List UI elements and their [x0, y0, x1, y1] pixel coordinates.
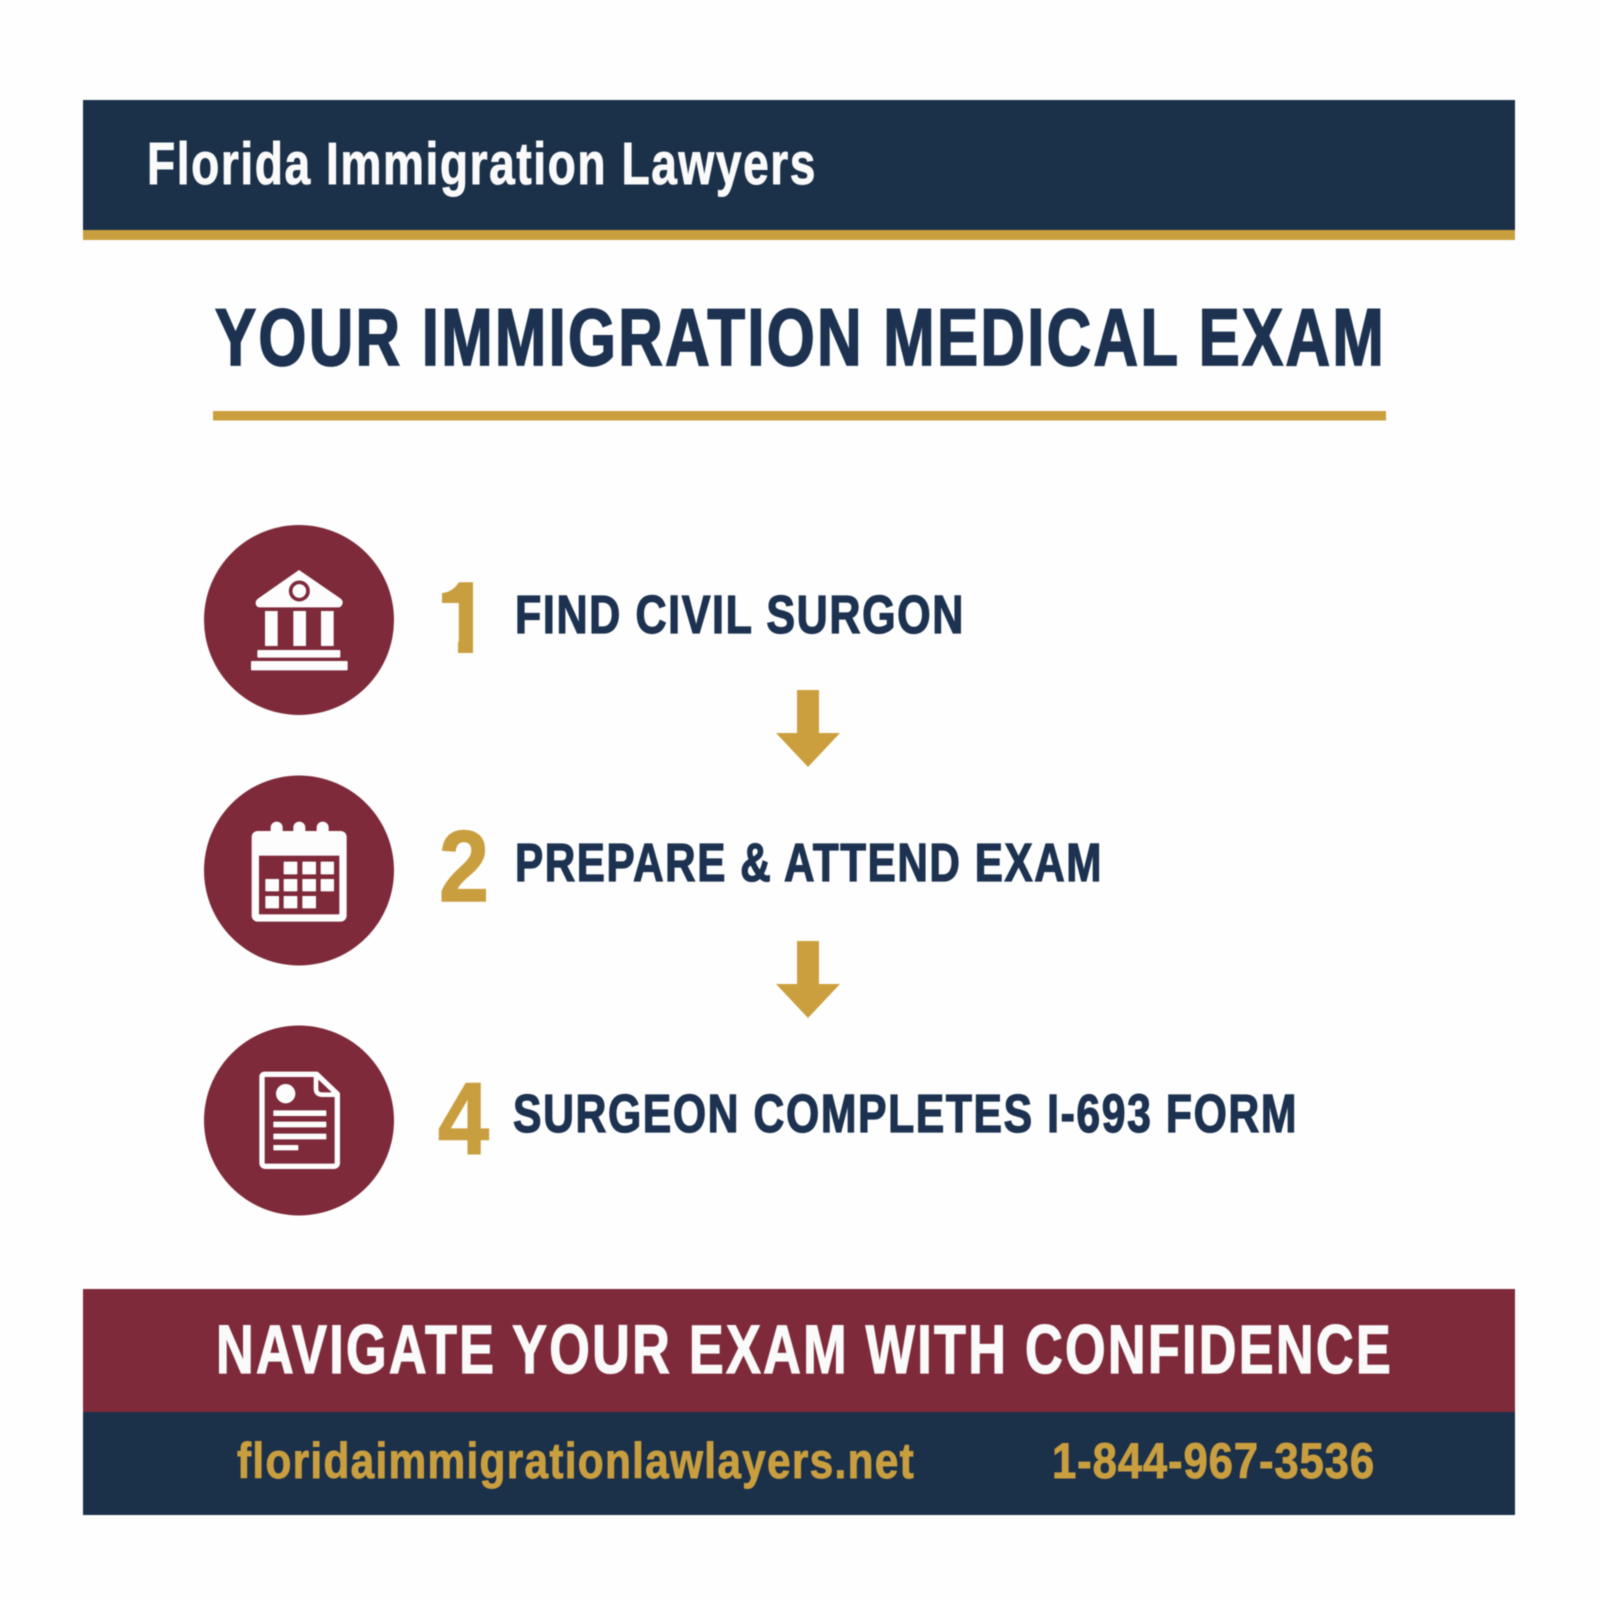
icon: courthouse	[204, 525, 394, 715]
call to action band	[83, 1289, 1515, 1412]
arrow 2	[776, 941, 840, 1018]
step label 3: SURGEON COMPLETES I-693 FORM	[513, 1084, 1298, 1144]
title underline	[213, 411, 1386, 420]
header band	[83, 100, 1515, 240]
step 1	[204, 525, 965, 715]
step number 2: 2	[439, 811, 489, 923]
icon: form document	[204, 1026, 394, 1216]
icon: calendar	[204, 776, 394, 966]
step label 2: PREPARE & ATTEND EXAM	[515, 833, 1103, 893]
phone number: 1-844-967-3536	[1052, 1433, 1375, 1489]
step 2	[204, 776, 1103, 966]
website: floridaimmigrationlawlayers.net	[237, 1433, 915, 1489]
organisation name: Florida Immigration Lawyers	[147, 131, 817, 197]
step label 1: FIND CIVIL SURGON	[515, 585, 965, 645]
step number 1: 1	[436, 561, 492, 675]
step 3	[204, 1026, 1298, 1216]
contact band	[83, 1412, 1515, 1515]
step number 4: 4	[438, 1062, 489, 1176]
arrow 1	[776, 690, 840, 767]
step number 1	[441, 582, 474, 654]
